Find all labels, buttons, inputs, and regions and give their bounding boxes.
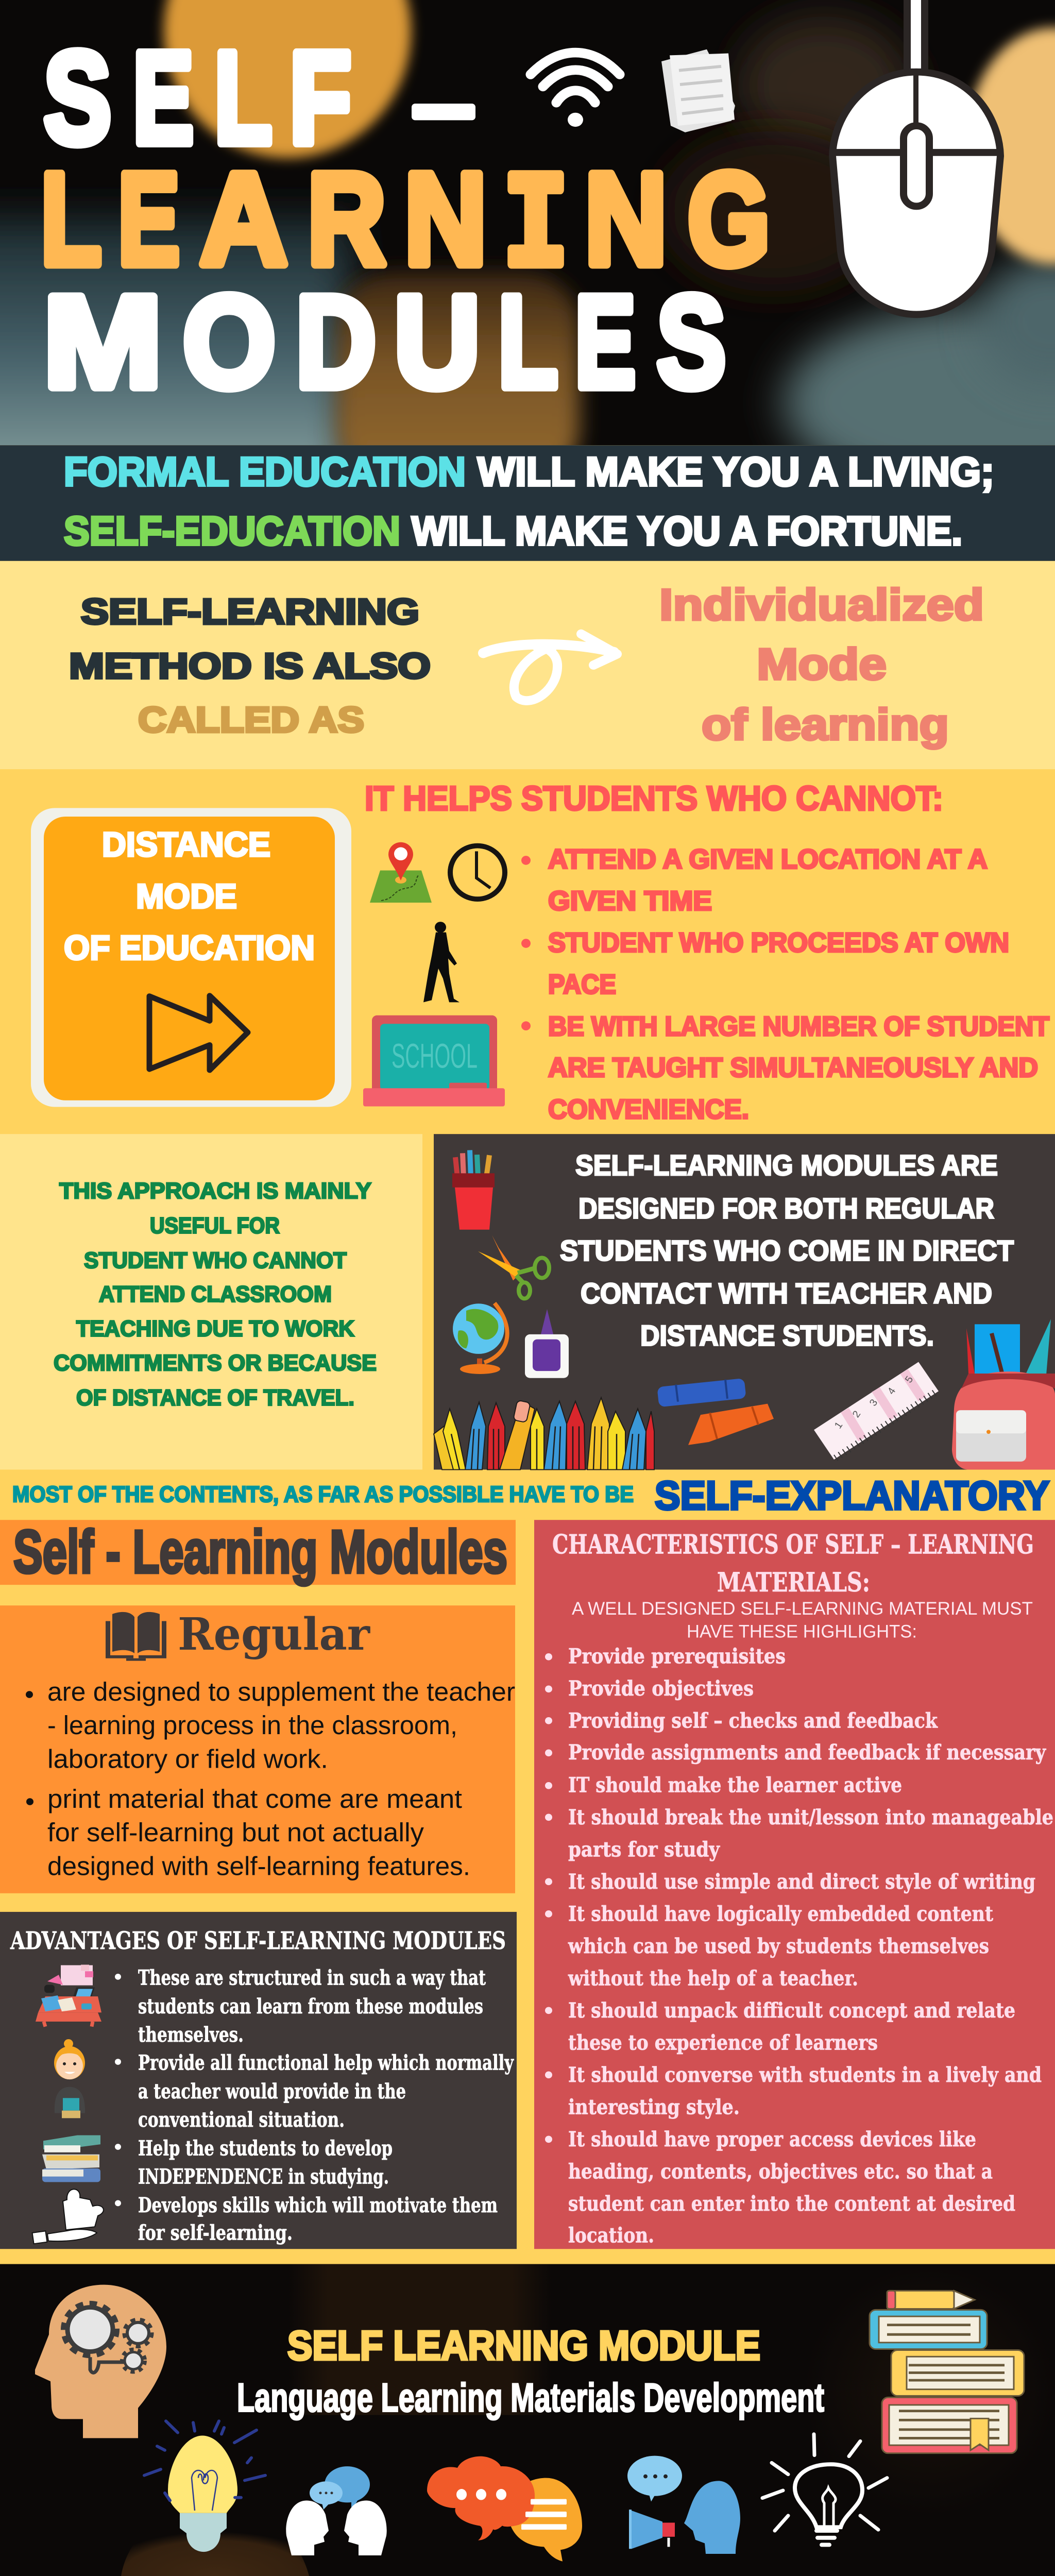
list: characteristics: location. <box>568 2223 654 2247</box>
list: characteristics: IT should make the learner active <box>568 1773 902 1797</box>
footer background <box>0 2264 1055 2576</box>
heading: characteristics: MATERIALS: <box>717 1567 870 1598</box>
title: SELF: F <box>290 25 351 171</box>
icon: scissors <box>478 1235 549 1299</box>
card: distance mode of education <box>31 808 351 1107</box>
text: designed for both <box>560 1149 1014 1351</box>
list: characteristics <box>545 1644 1053 2247</box>
panel: heading self-learning modules: Self - Learning Modules <box>13 1518 507 1586</box>
title: MODULES: O <box>183 269 276 415</box>
heading: regular: Regular <box>178 1608 370 1660</box>
card text: OF EDUCATION <box>64 929 315 967</box>
list: regular points: designed with self-learning features. <box>47 1851 470 1881</box>
panel: also called as <box>0 561 1055 769</box>
panel: regular and distance students <box>434 1134 1055 1470</box>
subheading: highlights <box>572 1598 1033 1642</box>
icon: puzzle in hand <box>32 2189 104 2244</box>
title: MODULES: S <box>657 269 726 415</box>
heading: self-learning method is also called as: CALLED AS <box>138 700 364 740</box>
text: approach usefulness: TEACHING DUE TO WORK <box>76 1316 354 1342</box>
title: LEARNING: A <box>200 146 287 292</box>
list: characteristics: Provide objectives <box>568 1676 754 1701</box>
heading: advantages: ADVANTAGES OF SELF-LEARNING MODULES <box>10 1927 506 1955</box>
list: characteristics: these to experience of learners <box>568 2030 878 2055</box>
icon: clock <box>450 846 505 899</box>
list: advantages: These are structured in such a way that <box>138 1965 486 1990</box>
icon: school chalkboard: SCHOOL <box>392 1037 478 1075</box>
icon: row of pencils <box>434 1398 654 1470</box>
icon: stack of books with pencil <box>870 2291 1024 2453</box>
icon: open book <box>106 1612 166 1661</box>
icon: teacher <box>54 2039 85 2118</box>
icon: glue bottle <box>525 1309 569 1378</box>
arrow: white squiggle <box>483 634 617 701</box>
footer heading: SELF LEARNING MODULE <box>287 2323 760 2369</box>
list: reasons <box>521 844 1049 1125</box>
text: individualized mode of learning: Mode <box>757 640 887 689</box>
text: designed for both: STUDENTS WHO COME IN DIRECT <box>560 1234 1014 1266</box>
title: SELF: S <box>44 25 111 171</box>
panel: characteristics <box>534 1520 1055 2249</box>
heading: self-learning method is also called as: SELF-LEARNING <box>81 591 419 632</box>
list: regular points: for self-learning but not actually <box>47 1818 424 1847</box>
icon: map pin <box>370 842 432 903</box>
list: advantages: for self-learning. <box>138 2221 293 2245</box>
title: MODULES: E <box>575 269 636 415</box>
icon: walking person <box>423 922 460 1002</box>
banner: self-explanatory line: MOST OF THE CONTENTS, AS FAR AS POSSIBLE HAVE TO BE <box>12 1482 634 1507</box>
heading: characteristics <box>552 1529 1034 1598</box>
icon: person with megaphone <box>627 2456 740 2554</box>
header bokeh background <box>0 0 1055 445</box>
icon: white outline bulb <box>762 2434 887 2545</box>
panel: it helps students <box>0 769 1055 1134</box>
icon: ruler: 3 <box>867 1397 880 1408</box>
icon: book stack <box>42 2136 100 2182</box>
text: designed for both: DESIGNED FOR BOTH REGULAR <box>578 1192 994 1224</box>
icon: ruler: 2 <box>850 1409 863 1420</box>
footer subheading: Language Learning Materials Development <box>237 2375 824 2420</box>
list: reasons: GIVEN TIME <box>548 886 712 916</box>
list: characteristics: parts for study <box>568 1837 720 1861</box>
list: characteristics: Provide prerequisites <box>568 1644 786 1668</box>
list: regular points: print material that come are meant <box>47 1784 462 1814</box>
card text: MODE <box>136 877 237 916</box>
list: advantages: a teacher would provide in the <box>138 2079 406 2104</box>
icon: ruler: 1 <box>832 1420 845 1431</box>
text: approach usefulness: OF DISTANCE OF TRAVEL. <box>76 1385 354 1410</box>
arrow: outlined right arrow <box>149 996 248 1070</box>
text: approach usefulness: THIS APPROACH IS MAINLY <box>59 1179 371 1204</box>
list: characteristics: It should have proper access devices like <box>568 2127 976 2151</box>
subheading: highlights: A WELL DESIGNED SELF-LEARNING MATERIAL MUST <box>572 1598 1033 1619</box>
quote line 1: FORMAL EDUCATION <box>64 449 466 494</box>
quote line 2 <box>64 508 962 553</box>
title: dash <box>412 104 475 120</box>
list: characteristics: interesting style. <box>568 2095 740 2119</box>
icon: head with gears <box>35 2285 166 2438</box>
footer: dark banner <box>0 2264 1055 2576</box>
list: advantages: conventional situation. <box>138 2107 345 2132</box>
list: advantages: themselves. <box>138 2022 244 2047</box>
title: LEARNING: N <box>585 146 667 292</box>
title: MODULES: M <box>43 269 162 415</box>
list: reasons: PACE <box>548 970 616 1000</box>
panel: advantages <box>0 1912 517 2249</box>
text: approach usefulness <box>54 1179 377 1410</box>
text: individualized mode of learning: of learning <box>702 700 949 749</box>
title: LEARNING: I <box>503 151 569 306</box>
list: regular points: laboratory or field work. <box>47 1744 328 1774</box>
list: characteristics: which can be used by students themselves <box>568 1934 989 1958</box>
icon: speech bubbles <box>427 2456 582 2562</box>
text: individualized mode of learning: Individualized <box>659 581 984 630</box>
text: approach usefulness: COMMITMENTS OR BECAUSE <box>54 1351 377 1376</box>
list: reasons: STUDENT WHO PROCEEDS AT OWN <box>548 928 1009 958</box>
text: designed for both: DISTANCE STUDENTS. <box>640 1319 934 1351</box>
icon: ruler: 5 <box>903 1374 915 1385</box>
list: regular points: - learning process in the classroom, <box>47 1710 457 1740</box>
icon: paper document <box>661 49 735 132</box>
list: advantages: Develops skills which will motivate them <box>138 2193 498 2217</box>
subheading: highlights: HAVE THESE HIGHLIGHTS: <box>687 1621 917 1642</box>
icon: ruler: 4 <box>886 1386 898 1397</box>
list: reasons: CONVENIENCE. <box>548 1094 749 1125</box>
icon: globe <box>453 1303 507 1374</box>
card text: DISTANCE <box>102 826 270 864</box>
list: advantages: Help the students to develop <box>138 2136 393 2160</box>
icon: two people talking <box>286 2466 387 2555</box>
text: designed for both: SELF-LEARNING MODULES ARE <box>575 1149 998 1181</box>
quote line 2: SELF-EDUCATION <box>64 508 400 553</box>
icon: pencil cup <box>452 1150 495 1230</box>
icon: yellow light bulb <box>144 2421 265 2552</box>
icon: school chalkboard <box>363 1015 505 1106</box>
card text <box>64 826 315 967</box>
text: approach usefulness: ATTEND CLASSROOM <box>99 1282 332 1307</box>
heading: self-learning method is also called as <box>69 591 431 740</box>
quote line 1 <box>64 449 994 494</box>
title: LEARNING: L <box>41 146 101 292</box>
text: approach usefulness: USEFUL FOR <box>150 1213 280 1238</box>
list: advantages: students can learn from these modules <box>138 1994 483 2019</box>
icon: wifi <box>531 53 620 127</box>
header: title banner <box>0 0 1055 445</box>
title: SELF: L <box>214 25 272 171</box>
list: regular points <box>26 1676 515 1881</box>
title: SELF: E <box>133 25 194 171</box>
heading: self-learning method is also called as: METHOD IS ALSO <box>69 646 431 686</box>
text: designed for both: CONTACT WITH TEACHER AND <box>581 1277 992 1309</box>
panel: regular modules <box>0 1605 515 1893</box>
heading: it helps students who cannot: IT HELPS STUDENTS WHO CANNOT: <box>365 779 943 818</box>
panel: quote band <box>0 445 1055 561</box>
text: approach usefulness: STUDENT WHO CANNOT <box>84 1248 347 1273</box>
text: individualized mode of learning <box>659 581 984 749</box>
list: advantages: INDEPENDENCE in studying. <box>138 2164 389 2189</box>
list: characteristics: without the help of a teacher. <box>568 1966 858 1990</box>
title: LEARNING: G <box>688 146 770 292</box>
quote line 2: WILL MAKE YOU A FORTUNE. <box>412 508 962 553</box>
icon: backpack <box>952 1319 1055 1470</box>
list: advantages <box>115 1965 514 2245</box>
list: advantages: Provide all functional help which normally <box>138 2050 514 2075</box>
title: LEARNING: R <box>308 146 386 292</box>
list: regular points: are designed to supplement the teacher <box>47 1676 515 1706</box>
title: MODULES: D <box>296 269 376 415</box>
icon: computer mouse <box>832 0 1000 314</box>
quote line 1: WILL MAKE YOU A LIVING; <box>478 449 994 494</box>
list: reasons: ARE TAUGHT SIMULTANEOUSLY AND <box>548 1053 1038 1083</box>
title: MODULES: U <box>394 269 480 415</box>
panel: approach note <box>0 1134 422 1470</box>
title: LEARNING: E <box>118 146 180 292</box>
title: LEARNING: N <box>404 146 487 292</box>
title: MODULES: L <box>498 269 558 415</box>
list: characteristics: Providing self – checks and feedback <box>568 1708 938 1733</box>
icon: ruler <box>814 1362 939 1460</box>
icon: crayons <box>657 1378 774 1445</box>
icon: study desk <box>36 1964 101 2027</box>
banner: self-explanatory line <box>12 1473 1049 1518</box>
list: reasons: ATTEND A GIVEN LOCATION AT A <box>548 844 988 874</box>
